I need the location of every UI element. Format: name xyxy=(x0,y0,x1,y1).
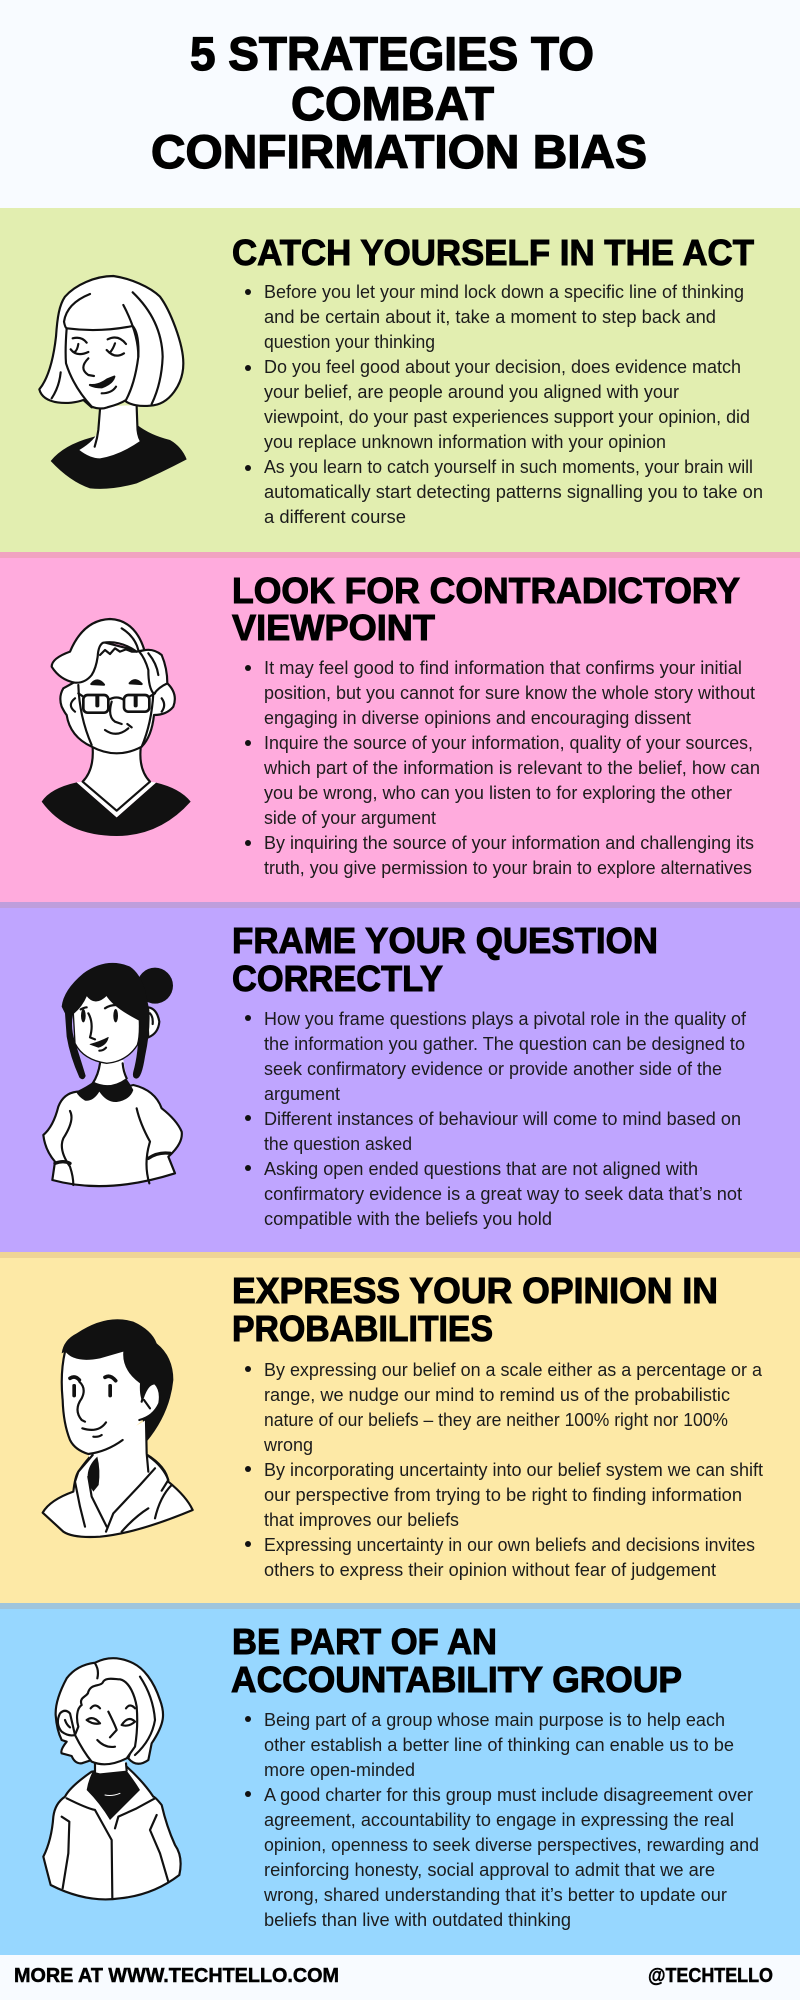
bullet list: catch yourself in the act: you replace unknown information with your opinion xyxy=(264,431,666,452)
bullet list: be part of an accountability group: A good charter for this group must include disagreement over xyxy=(264,1784,753,1805)
heading: look for contradictory viewpoint: VIEWPOINT xyxy=(232,607,435,648)
bullet list: catch yourself in the act: automatically start detecting patterns signalling you to take on xyxy=(264,481,763,502)
bullet list: express your opinion in probabilities: that improves our beliefs xyxy=(264,1509,459,1530)
heading: be part of an accountability group xyxy=(231,1621,682,1700)
footer xyxy=(14,1965,773,1987)
bullet list: express your opinion in probabilities: range, we nudge our mind to remind us of the probabilistic xyxy=(264,1384,730,1405)
heading: be part of an accountability group: ACCOUNTABILITY GROUP xyxy=(231,1659,682,1700)
heading: look for contradictory viewpoint xyxy=(232,570,740,648)
bullet list: catch yourself in the act: As you learn to catch yourself in such moments, your brain will xyxy=(264,456,753,477)
bullet list: express your opinion in probabilities: our perspective from trying to be right to finding information xyxy=(264,1484,742,1505)
bullet list: be part of an accountability group: Being part of a group whose main purpose is to help each xyxy=(264,1709,725,1730)
bullet list: catch yourself in the act xyxy=(245,281,763,527)
bullet list: look for contradictory viewpoint: Inquire the source of your information, quality of your sources, xyxy=(264,732,753,753)
bullet list: look for contradictory viewpoint: engaging in diverse opinions and encouraging dissent xyxy=(264,707,691,728)
heading: express your opinion in probabilities: EXPRESS YOUR OPINION IN xyxy=(232,1270,718,1311)
bullet list: catch yourself in the act: a different course xyxy=(264,506,406,527)
bullet list: frame your question correctly: the question asked xyxy=(264,1133,412,1154)
panel: frame your question correctly xyxy=(0,902,800,1252)
bullet list: be part of an accountability group: other establish a better line of thinking can enable us to be xyxy=(264,1734,734,1755)
panel: catch yourself in the act xyxy=(0,208,800,552)
bullet list: catch yourself in the act: and be certain about it, take a moment to step back and xyxy=(264,306,716,327)
bullet list: be part of an accountability group: more open-minded xyxy=(264,1759,415,1780)
heading: express your opinion in probabilities: PROBABILITIES xyxy=(232,1308,493,1349)
bullet list: express your opinion in probabilities xyxy=(245,1359,763,1580)
title: 5 STRATEGIES TO xyxy=(190,28,594,81)
bullet list: catch yourself in the act: your belief, are people around you aligned with your xyxy=(264,381,679,402)
bullet list: express your opinion in probabilities: Expressing uncertainty in our own beliefs and decisions invites xyxy=(264,1534,755,1555)
bullet list: look for contradictory viewpoint: It may feel good to find information that confirms your initial xyxy=(264,657,742,678)
bullet list: look for contradictory viewpoint: which part of the information is relevant to the belief, how can xyxy=(263,757,760,778)
bullet list: express your opinion in probabilities: nature of our beliefs – they are neither 100% right nor 100% xyxy=(264,1409,728,1430)
title: CONFIRMATION BIAS xyxy=(151,126,647,179)
footer: MORE AT WWW.TECHTELLO.COM xyxy=(14,1965,339,1987)
bullet list: frame your question correctly: Asking open ended questions that are not aligned with xyxy=(264,1158,698,1179)
bullet list: express your opinion in probabilities: By expressing our belief on a scale either as a percentage or a xyxy=(264,1359,763,1380)
heading: catch yourself in the act: CATCH YOURSELF IN THE ACT xyxy=(232,232,754,273)
icon: man with glasses xyxy=(42,619,191,836)
bullet list: frame your question correctly: How you frame questions plays a pivotal role in the quality of xyxy=(264,1008,747,1029)
title xyxy=(151,28,647,179)
bullet list: be part of an accountability group: reinforcing honesty, social approval to admit that we are xyxy=(264,1859,715,1880)
heading: frame your question correctly: CORRECTLY xyxy=(232,958,443,999)
panel: express your opinion in probabilities xyxy=(0,1252,800,1603)
bullet list: catch yourself in the act: Do you feel good about your decision, does evidence match xyxy=(264,356,741,377)
bullet list: be part of an accountability group: opinion, openness to seek diverse perspectives, rewarding and xyxy=(264,1834,759,1855)
heading: be part of an accountability group: BE PART OF AN xyxy=(232,1621,497,1662)
bullet list: look for contradictory viewpoint: position, but you cannot for sure know the whole story without xyxy=(264,682,755,703)
bullet list: express your opinion in probabilities: wrong xyxy=(263,1434,313,1455)
icon: woman with bob haircut xyxy=(39,276,187,489)
bullet list: catch yourself in the act: viewpoint, do your past experiences support your opinion, did xyxy=(264,406,750,427)
footer: @TECHTELLO xyxy=(648,1965,773,1987)
bullet list: express your opinion in probabilities: By incorporating uncertainty into our belief system we can shift xyxy=(264,1459,763,1480)
heading: frame your question correctly: FRAME YOUR QUESTION xyxy=(232,920,658,961)
bullet list: frame your question correctly: the information you gather. The question can be designed to xyxy=(264,1033,745,1054)
bullet list: look for contradictory viewpoint: truth, you give permission to your brain to explore alternatives xyxy=(264,857,752,878)
bullet list: look for contradictory viewpoint: side of your argument xyxy=(264,807,436,828)
bullet list: frame your question correctly: argument xyxy=(264,1083,340,1104)
bullet list: look for contradictory viewpoint: you be wrong, who can you listen to for exploring the other xyxy=(264,782,732,803)
heading: frame your question correctly xyxy=(232,920,658,999)
heading: express your opinion in probabilities xyxy=(232,1270,718,1349)
bullet list: frame your question correctly: confirmatory evidence is a great way to seek data that’s not xyxy=(264,1183,742,1204)
icon: woman with hair bun xyxy=(43,963,182,1186)
bullet list: frame your question correctly: compatible with the beliefs you hold xyxy=(264,1208,552,1229)
bullet list: be part of an accountability group: agreement, accountability to engage in expressing the real xyxy=(264,1809,734,1830)
heading: look for contradictory viewpoint: LOOK FOR CONTRADICTORY xyxy=(232,570,740,611)
panel: be part of an accountability group xyxy=(0,1603,800,1955)
bullet list: frame your question correctly: Different instances of behaviour will come to mind based on xyxy=(264,1108,741,1129)
bullet list: look for contradictory viewpoint: By inquiring the source of your information and challenging its xyxy=(264,832,754,853)
icon: smiling woman in jacket xyxy=(43,1658,181,1899)
panel: look for contradictory viewpoint xyxy=(0,552,800,902)
bullet list: be part of an accountability group: wrong, shared understanding that it’s better to update our xyxy=(263,1884,727,1905)
bullet list: be part of an accountability group xyxy=(245,1709,759,1930)
title: COMBAT xyxy=(291,78,494,131)
bullet list: be part of an accountability group: beliefs than live with outdated thinking xyxy=(264,1909,571,1930)
bullet list: catch yourself in the act: question your thinking xyxy=(264,331,435,352)
icon: man with dark hair xyxy=(43,1319,193,1537)
bullet list: express your opinion in probabilities: others to express their opinion without fear of judgement xyxy=(264,1559,716,1580)
bullet list: frame your question correctly: seek confirmatory evidence or provide another side of the xyxy=(264,1058,722,1079)
bullet list: look for contradictory viewpoint xyxy=(245,657,760,878)
bullet list: frame your question correctly xyxy=(245,1008,747,1229)
bullet list: catch yourself in the act: Before you let your mind lock down a specific line of thinking xyxy=(264,281,744,302)
